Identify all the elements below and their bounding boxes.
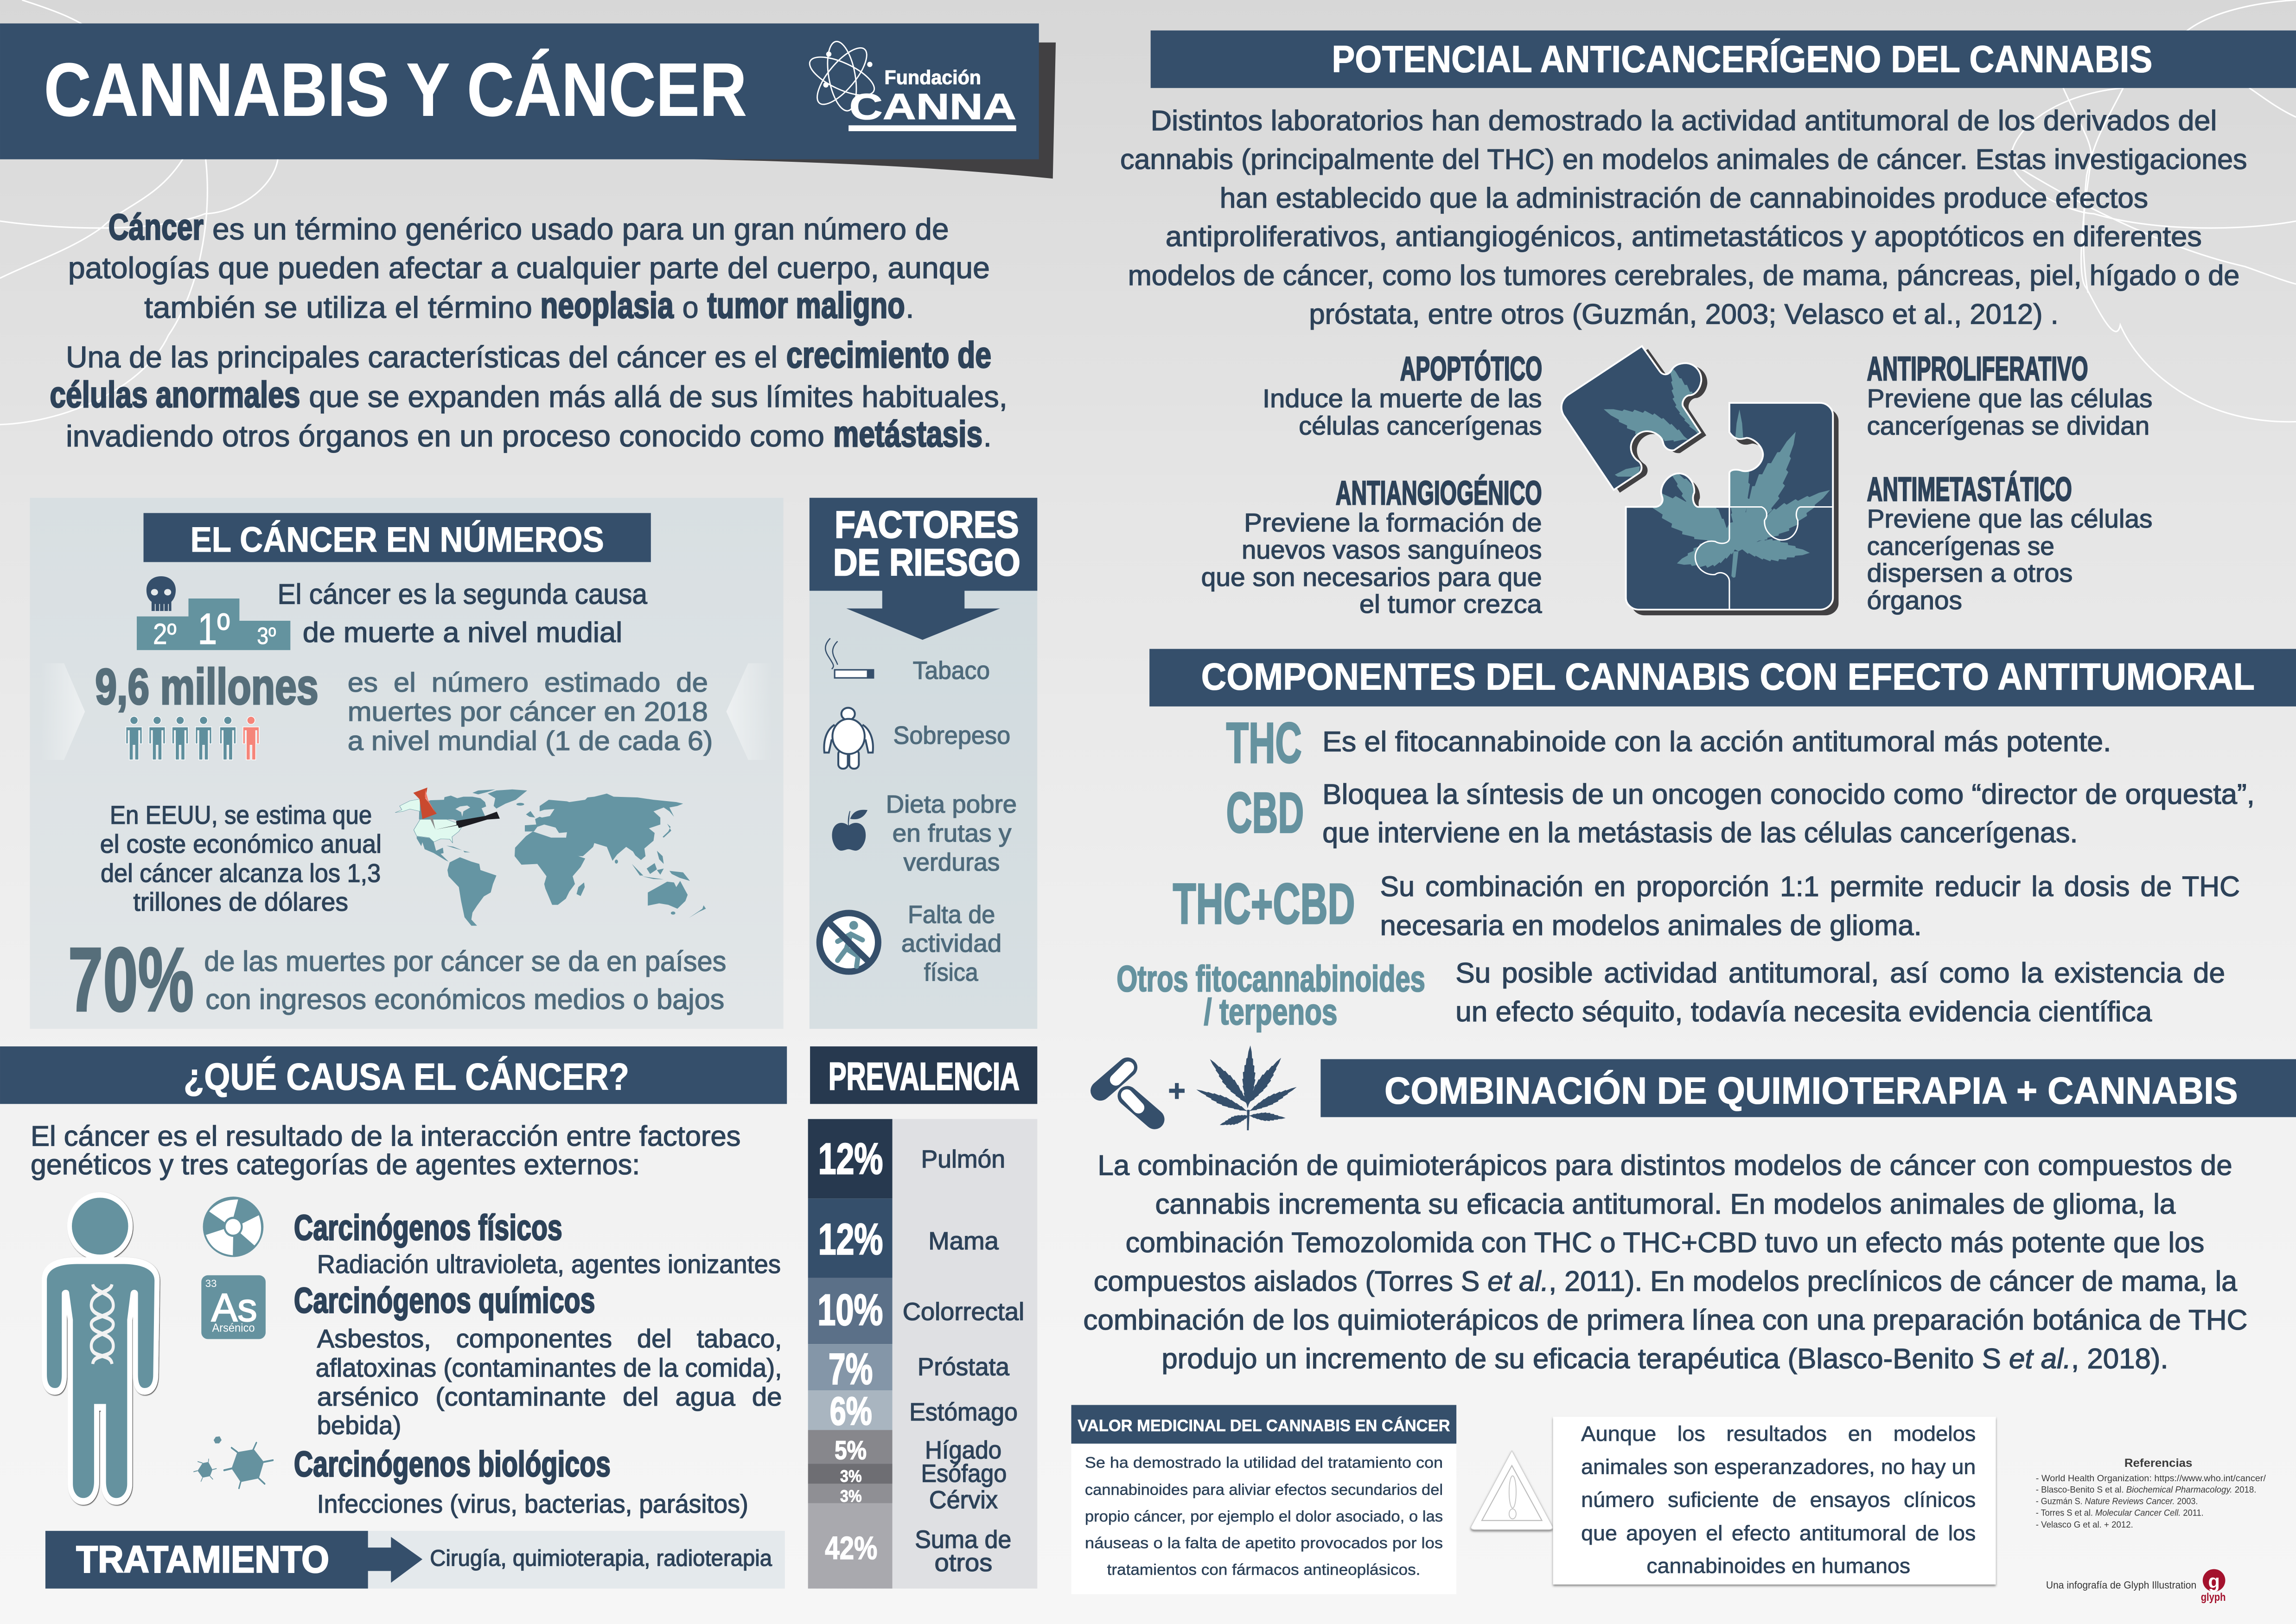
cancer type labels: Hígado xyxy=(925,1436,1001,1464)
text: segunda causa: El cáncer es la segunda causa xyxy=(277,579,648,611)
intro text: neoplasia xyxy=(540,285,674,325)
text: resultado de la interacción: genéticos y tres categorías de agentes externos: xyxy=(31,1149,640,1181)
block: apoptótico: Induce la muerte de las xyxy=(1263,384,1542,413)
intro text: que se expanden más allá de sus límites habituales, xyxy=(309,380,1008,414)
text: número estimado xyxy=(348,668,713,756)
text: potencial anticancerígeno: han establecido que la administración de cannabinoides produce efectos xyxy=(1220,182,2148,214)
logo: glyph: glyph xyxy=(2201,1592,2226,1604)
logo: Fundación Canna: Fundación xyxy=(885,66,981,89)
arrow xyxy=(368,1537,422,1583)
block: antiproliferativo: Previene que las células xyxy=(1867,384,2152,413)
credit: Una infografía de Glyph Illustration xyxy=(2046,1579,2196,1591)
label: sobrepeso: Sobrepeso xyxy=(893,721,1010,749)
text: número estimado: es el número estimado de xyxy=(348,668,708,698)
icon: arsenic element: Arsénico xyxy=(212,1322,255,1335)
text: combinación quimioterapia: combinación Temozolomida con THC o THC+CBD tuvo un efecto más potente que los xyxy=(1126,1227,2204,1259)
text: coste en EEUU: trillones de dólares xyxy=(133,887,348,916)
text: potencial anticancerígeno: antiproliferativos, antiangiogénicos, antimetastáticos y apoptóticos en diferentes xyxy=(1166,221,2202,253)
icon: map pin xyxy=(413,788,500,829)
block: apoptótico xyxy=(1263,350,1542,440)
component: CBD xyxy=(1226,778,2255,849)
icon: arsenic element xyxy=(201,1275,266,1339)
block: antiangiogénico xyxy=(1201,474,1542,618)
callout: advertencia: Aunque los resultados en modelos xyxy=(1581,1422,1976,1446)
icon: cannabis leaf xyxy=(1194,1045,1299,1130)
podium: 2º xyxy=(153,618,177,650)
podium xyxy=(137,599,290,654)
text: número estimado: muertes por cáncer en 2018 xyxy=(348,697,708,727)
references: - Guzmán S. Nature Reviews Cancer. 2003. xyxy=(2036,1497,2198,1507)
intro text: Cáncer xyxy=(108,207,204,248)
icon: plus xyxy=(1169,1083,1185,1099)
block: carcinógenos biológicos: Carcinógenos biológicos xyxy=(294,1444,611,1484)
label: dieta pobre: en frutas y xyxy=(893,819,1012,847)
prevalence bar stack xyxy=(808,1119,893,1589)
cancer type labels: Cérvix xyxy=(929,1486,998,1514)
block: carcinógenos biológicos xyxy=(294,1444,748,1518)
block: carcinógenos químicos: arsénico (contaminante del agua de xyxy=(317,1382,782,1411)
text: resultado de la interacción xyxy=(31,1121,740,1181)
block: antiangiogénico: que son necesarios para que xyxy=(1201,563,1542,592)
panel: tratamiento xyxy=(45,1531,785,1589)
icon: skull xyxy=(147,576,176,611)
label: falta de actividad física xyxy=(901,901,1001,986)
percent labels: 7% xyxy=(829,1344,873,1394)
icon: six people xyxy=(126,716,259,760)
panel: factores de riesgo xyxy=(810,498,1037,1029)
block: carcinógenos físicos: Radiación ultravioleta, agentes ionizantes xyxy=(317,1250,781,1279)
percent labels: 3% xyxy=(840,1466,862,1485)
block: carcinógenos químicos xyxy=(294,1280,782,1439)
component: otros fitocannabinoides: / terpenos xyxy=(1204,991,1337,1032)
cancer type labels: Pulmón xyxy=(921,1146,1005,1173)
callout: advertencia: cannabinoides en humanos xyxy=(1646,1554,1910,1578)
text: segunda causa xyxy=(277,579,648,649)
cancer type labels: Estómago xyxy=(909,1398,1018,1426)
intro text: . xyxy=(983,419,992,453)
text: coste en EEUU xyxy=(100,801,382,916)
percent labels: 12% xyxy=(818,1134,883,1184)
cancer type labels: otros xyxy=(935,1549,992,1577)
component: CBD: Bloquea la síntesis de un oncogen conocido como “director de orquesta”, xyxy=(1322,778,2255,810)
icon: pills xyxy=(1100,1067,1154,1119)
cancer type labels: Mama xyxy=(928,1227,999,1255)
text: segunda causa: de muerte a nivel mudial xyxy=(303,617,622,649)
block: antimetastático: órganos xyxy=(1867,586,1962,615)
icon: cigarette xyxy=(825,638,874,678)
percent labels: 5% xyxy=(835,1436,867,1465)
intro text xyxy=(50,207,1008,454)
block: carcinógenos biológicos: Infecciones (virus, bacterias, parásitos) xyxy=(317,1490,748,1518)
text: países ingresos: de las muertes por cáncer se da en países xyxy=(204,945,726,977)
panel: prevalencia xyxy=(808,1046,1037,1589)
block: carcinógenos químicos: aflatoxinas (contaminantes de la comida), xyxy=(316,1353,782,1382)
block: antiangiogénico: el tumor crezca xyxy=(1359,590,1542,618)
text: potencial anticancerígeno: modelos de cáncer, como los tumores cerebrales, de mama, páncreas, piel, hígado o de xyxy=(1128,260,2239,292)
text: combinación quimioterapia: La combinación de quimioterápicos para distintos modelos de cáncer con compuestos de xyxy=(1097,1150,2232,1182)
callout: advertencia: que apoyen el efecto antitumoral de los xyxy=(1581,1521,1976,1545)
block: antiangiogénico: Previene la formación de xyxy=(1244,508,1542,537)
text: coste en EEUU: el coste económico anual xyxy=(100,830,382,859)
panel: valor medicinal: tratamientos con fármacos antineoplásicos. xyxy=(1107,1561,1420,1579)
logo: glyph xyxy=(2201,1569,2226,1604)
cancer type labels: Colorrectal xyxy=(903,1298,1024,1325)
chevrons xyxy=(41,663,772,760)
block: antiproliferativo xyxy=(1867,350,2152,440)
component: THC xyxy=(1226,712,2111,775)
world map xyxy=(395,788,706,926)
banner shadow xyxy=(618,43,1056,178)
heading arrow: DE RIESGO xyxy=(833,541,1020,584)
component: THC+CBD: necesaria en modelos animales de glioma. xyxy=(1380,910,1922,942)
text: resultado de la interacción: El cáncer es el resultado de la interacción entre factores xyxy=(31,1121,740,1153)
decorative swirls xyxy=(0,0,2296,425)
logo: Fundación Canna xyxy=(804,39,1016,131)
intro text: es un término genérico usado para un gran número de xyxy=(212,212,949,246)
callout: advertencia: animales son esperanzadores, no hay un xyxy=(1581,1455,1976,1478)
component: THC+CBD xyxy=(1173,871,2240,942)
intro text: también se utiliza el término xyxy=(144,290,532,324)
component: otros fitocannabinoides xyxy=(1116,957,2225,1032)
panel: valor medicinal: cannabinoides para aliviar efectos secundarios del xyxy=(1085,1481,1443,1498)
cancer type labels: Próstata xyxy=(918,1353,1009,1381)
heading: el cáncer en números: EL CÁNCER EN NÚMEROS xyxy=(191,520,604,560)
percent labels xyxy=(817,1134,883,1566)
panel: valor medicinal: propio cáncer, por ejemplo el dolor asociado, o las xyxy=(1085,1508,1443,1525)
component: CBD: CBD xyxy=(1226,782,1304,845)
block: antiangiogénico: ANTIANGIOGÉNICO xyxy=(1336,474,1542,512)
title banner xyxy=(0,24,1056,178)
text: combinación quimioterapia: compuestos aislados (Torres S et al., 2011). En modelos preclínicos de cáncer de mama, la xyxy=(1094,1266,2238,1298)
block: carcinógenos químicos: Asbestos, componentes del tabaco, xyxy=(317,1325,782,1353)
callout: advertencia: número suficiente de ensayos clínicos xyxy=(1581,1488,1976,1512)
label: falta de actividad física: actividad xyxy=(901,930,1001,957)
icon: puzzle with cannabis leaf xyxy=(1562,346,1838,615)
text: número estimado: a nivel mundial (1 de cada 6) xyxy=(348,726,713,756)
intro text: Una de las principales características del cáncer es el xyxy=(66,340,778,374)
component: otros fitocannabinoides: Otros fitocannabinoides xyxy=(1116,958,1425,999)
callout: advertencia xyxy=(1553,1417,1996,1585)
intro text: . xyxy=(906,290,914,324)
block: apoptótico: APOPTÓTICO xyxy=(1400,350,1542,388)
text: países ingresos: con ingresos económicos medios o bajos xyxy=(205,984,724,1016)
icon: radiation xyxy=(203,1197,263,1257)
panel: tratamiento: Cirugía, quimioterapia, radioterapia xyxy=(430,1546,772,1571)
panel: valor medicinal: VALOR MEDICINAL DEL CANNABIS EN CÁNCER xyxy=(1078,1416,1450,1435)
block: antimetastático: dispersen a otros xyxy=(1867,559,2073,587)
label: tabaco: Tabaco xyxy=(913,657,990,685)
intro text: o xyxy=(682,290,698,324)
panel: tratamiento: TRATAMIENTO xyxy=(76,1539,329,1581)
label: falta de actividad física: física xyxy=(924,958,978,986)
cancer type labels: Suma de xyxy=(915,1526,1011,1554)
block: carcinógenos físicos: Carcinógenos físicos xyxy=(294,1208,562,1248)
block: apoptótico: células cancerígenas xyxy=(1299,411,1542,440)
intro text: células anormales xyxy=(50,374,300,415)
icon: overweight person xyxy=(824,708,873,769)
panel: valor medicinal: náuseas o la falta de apetito provocados por los xyxy=(1085,1535,1443,1552)
icon: arsenic element: 33 xyxy=(205,1278,217,1289)
block: carcinógenos químicos: Carcinógenos químicos xyxy=(294,1280,595,1320)
block: antimetastático: cancerígenas se xyxy=(1867,532,2054,560)
text: coste en EEUU: del cáncer alcanza los 1,3 xyxy=(101,859,381,887)
stat: 70%: 70% xyxy=(68,929,194,1030)
icon: viruses xyxy=(193,1436,273,1488)
component: THC+CBD: Su combinación en proporción 1:1 permite reducir la dosis de THC xyxy=(1380,871,2240,903)
block: antimetastático: ANTIMETASTÁTICO xyxy=(1867,471,2072,508)
icon: arsenic element: As xyxy=(211,1286,257,1330)
percent labels: 12% xyxy=(818,1215,883,1264)
text: potencial anticancerígeno xyxy=(1120,105,2247,331)
label: dieta pobre: Dieta pobre xyxy=(886,790,1017,818)
panel: valor medicinal: Se ha demostrado la utilidad del tratamiento con xyxy=(1085,1454,1443,1471)
references: - World Health Organization: https://www.who.int/cancer/ xyxy=(2036,1473,2266,1484)
icon: warning triangle xyxy=(1471,1451,1553,1529)
cancer type labels xyxy=(903,1146,1024,1577)
component: otros fitocannabinoides: Su posible actividad antitumoral, así como la existencia de xyxy=(1455,957,2225,989)
heading arrow: FACTORES xyxy=(835,503,1019,546)
heading: potencial anticancerígeno xyxy=(1151,31,2296,88)
text: combinación quimioterapia: produjo un incremento de su eficacia terapéutica (Blasco-Benito S et al., 2018). xyxy=(1161,1343,2168,1375)
references: Referencias xyxy=(2124,1457,2192,1470)
text: países ingresos xyxy=(204,945,726,1016)
block: antiproliferativo: ANTIPROLIFERATIVO xyxy=(1867,350,2088,388)
icon: human figure with DNA xyxy=(47,1192,154,1498)
text: coste en EEUU: En EEUU, se estima que xyxy=(110,801,372,829)
intro text: invadiendo otros órganos en un proceso conocido como xyxy=(66,419,824,453)
component: THC: Es el fitocannabinoide con la acción antitumoral más potente. xyxy=(1322,726,2111,758)
logo: Fundación Canna: CANNA xyxy=(849,86,1016,127)
percent labels: 3% xyxy=(840,1487,862,1506)
block: antimetastático xyxy=(1867,471,2152,615)
heading: qué causa el cáncer xyxy=(0,1046,787,1104)
icon: apple xyxy=(832,810,867,851)
intro text: tumor maligno xyxy=(707,285,905,325)
block: carcinógenos físicos xyxy=(294,1208,781,1279)
block: antiproliferativo: cancerígenas se dividan xyxy=(1867,411,2149,440)
panel: valor medicinal xyxy=(1071,1405,1456,1594)
percent labels: 10% xyxy=(817,1286,883,1335)
stat: 9,6 millones: 9,6 millones xyxy=(95,658,319,715)
text: potencial anticancerígeno: Distintos laboratorios han demostrado la actividad antitumoral de los derivados del xyxy=(1151,105,2217,137)
label: dieta pobre xyxy=(886,790,1017,876)
icon: no physical activity xyxy=(820,913,878,972)
heading: combinación: COMBINACIÓN DE QUIMIOTERAPIA + CANNABIS xyxy=(1384,1070,2238,1112)
component: THC: THC xyxy=(1226,712,1302,775)
cancer type labels: Esófago xyxy=(921,1459,1007,1487)
text: potencial anticancerígeno: cannabis (principalmente del THC) en modelos animales de cáncer. Estas investigaciones xyxy=(1120,143,2247,175)
block: carcinógenos químicos: bebida) xyxy=(317,1411,401,1439)
title banner: CANNABIS Y CÁNCER xyxy=(44,48,747,132)
text: combinación quimioterapia: combinación de los quimioterápicos de primera línea con una preparación botánica de THC xyxy=(1083,1304,2247,1336)
heading: qué causa el cáncer: ¿QUÉ CAUSA EL CÁNCER? xyxy=(184,1056,629,1098)
percent labels: 42% xyxy=(825,1530,877,1566)
intro text: crecimiento de xyxy=(786,335,991,376)
panel: el cáncer en números xyxy=(30,498,784,1030)
label: falta de actividad física: Falta de xyxy=(908,901,995,929)
heading: combinación xyxy=(1320,1059,2296,1117)
references: - Blasco-Benito S et al. Biochemical Pharmacology. 2018. xyxy=(2036,1485,2256,1495)
heading: potencial anticancerígeno: POTENCIAL ANTICANCERÍGENO DEL CANNABIS xyxy=(1332,38,2152,80)
references: - Torres S et al. Molecular Cancer Cell. 2011. xyxy=(2036,1508,2204,1518)
component: CBD: que interviene en la metástasis de las células cancerígenas. xyxy=(1322,817,2078,849)
block: antimetastático: Previene que las células xyxy=(1867,504,2152,533)
label: dieta pobre: verduras xyxy=(904,848,1000,876)
logo: glyph: g xyxy=(2208,1571,2220,1592)
panel: prevalencia: PREVALENCIA xyxy=(829,1054,1020,1098)
text: combinación quimioterapia xyxy=(1083,1150,2247,1375)
block: antiangiogénico: nuevos vasos sanguíneos xyxy=(1242,535,1542,564)
references xyxy=(2036,1457,2266,1530)
intro text: metástasis xyxy=(833,414,982,454)
podium: 3º xyxy=(257,623,276,649)
text: combinación quimioterapia: cannabis incrementa su eficacia antitumoral. En modelos animales de glioma, la xyxy=(1155,1188,2176,1220)
references: - Velasco G et al. + 2012. xyxy=(2036,1520,2133,1530)
component: THC+CBD: THC+CBD xyxy=(1173,873,1355,936)
intro text: patologías que pueden afectar a cualquier parte del cuerpo, aunque xyxy=(68,251,990,285)
percent labels: 6% xyxy=(830,1389,872,1433)
heading arrow xyxy=(810,498,1037,640)
podium: 1º xyxy=(198,605,230,654)
text: potencial anticancerígeno: próstata, entre otros (Guzmán, 2003; Velasco et al., 2012) . xyxy=(1309,299,2059,331)
component: otros fitocannabinoides: un efecto séquito, todavía necesita evidencia científica xyxy=(1455,996,2152,1028)
